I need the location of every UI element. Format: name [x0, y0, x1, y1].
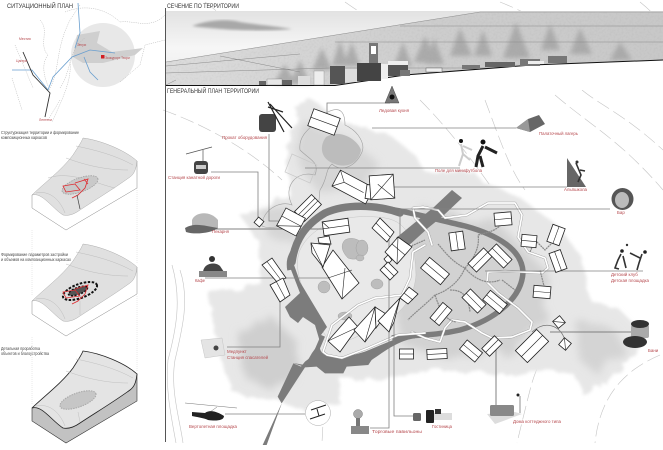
cottage [400, 349, 414, 359]
building: left strip upper [262, 258, 286, 282]
icon: first aid [201, 338, 269, 360]
block sides [32, 161, 137, 230]
caption line 2: и объемов на композиционных каркасах [1, 257, 72, 262]
building: south chain 2 [354, 307, 376, 342]
river [12, 3, 115, 90]
terrain contours [36, 359, 133, 426]
label: Кафе [195, 278, 205, 283]
label: Вертолетная площадка [189, 424, 238, 429]
map labels: Экокурорт Тхори [105, 56, 130, 60]
label: Ледовая кухня [379, 108, 410, 113]
label: Бар [617, 210, 625, 215]
heading: situation plan: СИТУАЦИОННЫЙ ПЛАН [7, 2, 73, 10]
building: right cluster small [384, 255, 392, 264]
cottage [533, 285, 551, 299]
building: south chain 4 [378, 298, 400, 332]
building group: west [295, 195, 321, 221]
panel: terrain section [166, 11, 663, 90]
caption: Детальная проработка [1, 346, 41, 351]
cottage [549, 250, 567, 272]
buildings [254, 109, 571, 363]
cottage [459, 340, 483, 362]
terrain surface [32, 138, 137, 215]
building: centre diamond [322, 250, 359, 299]
section buildings [259, 43, 567, 85]
building: upper square [369, 174, 395, 200]
caption: Структуризация территории и формирование [1, 130, 80, 135]
panel: master plan [205, 95, 643, 445]
label: Станция спасателей [227, 355, 269, 360]
white ground mask [335, 60, 663, 90]
upper pond [322, 134, 361, 166]
settlement drawing [58, 387, 98, 413]
building: left strip lower [270, 278, 290, 302]
hillside [166, 12, 663, 85]
small kiosk [254, 217, 264, 227]
lift tower [369, 43, 378, 63]
icon: rental gear [222, 102, 292, 140]
valley shape [73, 31, 143, 63]
label: Торговые павильоны [372, 429, 422, 434]
ground line [166, 60, 663, 86]
icon: bakery [185, 213, 230, 234]
cottage [488, 244, 512, 268]
cottage large south [515, 329, 549, 363]
label: Бани [648, 348, 659, 353]
hillside grain [169, 60, 257, 84]
white ring paths [323, 203, 548, 358]
misty forest [274, 22, 632, 84]
icon: kids club [611, 244, 650, 283]
terrain contours [36, 146, 133, 213]
terrain contours [36, 252, 133, 319]
icon: ice kitchen [379, 86, 410, 113]
cottage [547, 224, 565, 246]
building: centre long [322, 218, 350, 236]
label: Медпункт [227, 349, 247, 354]
building: centre upper [311, 243, 330, 267]
map labels: Цагери [16, 59, 27, 63]
sky [166, 11, 663, 85]
main vertical divider [164, 8, 166, 442]
building: south chain 5 [400, 287, 418, 304]
building: south chain 3 [375, 307, 386, 328]
study area circle [71, 23, 135, 87]
label: Станция канатной дороги [168, 175, 221, 180]
cottage [483, 290, 507, 314]
main access road [263, 262, 327, 445]
north-east road stub [396, 190, 462, 248]
caption line 2: композиционных каркасов [1, 135, 48, 140]
building: south chain 1 [328, 317, 358, 352]
cottage [521, 234, 537, 248]
leader lines [205, 103, 643, 428]
settlement pattern [60, 172, 100, 209]
terrain wash [207, 95, 640, 412]
ring road: thick north-west arc [292, 206, 400, 262]
label: Дома коттеджного типа [513, 419, 562, 424]
cottage [482, 336, 502, 356]
ring road [289, 206, 523, 338]
map labels: Энгри [77, 43, 86, 47]
label: Пекарня [212, 229, 230, 234]
label: Палаточный лагерь [539, 131, 579, 136]
building: right cluster low [380, 262, 398, 280]
label: Детский клуб [611, 272, 638, 277]
label: Детская площадка [611, 278, 650, 283]
road [23, 52, 50, 117]
bath house [553, 316, 565, 328]
icon: climbing school [564, 158, 588, 192]
main road lower arm [263, 333, 415, 445]
label: Поле для минифутбола [435, 168, 483, 173]
block sides [32, 267, 137, 336]
building: upper small [365, 185, 375, 199]
pedestrian network [402, 222, 555, 322]
terrain surface [32, 244, 137, 321]
building: upper long [332, 170, 374, 204]
icon: football players [435, 139, 497, 173]
settlement volumes [61, 278, 99, 304]
helipad [306, 400, 330, 426]
cottage [494, 212, 512, 226]
caption line 2: объектов и благоустройства [1, 351, 50, 356]
icon: bar barrel [612, 188, 634, 215]
dashed contour lines [163, 2, 663, 443]
label: Гостиница [432, 424, 453, 429]
bath house [559, 338, 571, 350]
panel: isometric step 3 [1, 346, 137, 443]
cottage [449, 231, 465, 251]
icon: cable car [168, 147, 221, 180]
building: right cluster diamond [385, 237, 412, 264]
cottage [427, 348, 447, 360]
block sides [32, 374, 137, 443]
icon: bath barrel [623, 320, 659, 353]
section lines [166, 12, 663, 85]
panel: isometric step 2 [1, 244, 137, 336]
dotted contours [12, 5, 165, 122]
cottage large [421, 257, 449, 285]
icon: cottage sofa [487, 394, 562, 424]
building: west square [277, 208, 305, 236]
building: top [308, 109, 340, 135]
icon: tent camp [516, 115, 579, 136]
ring interior tone [297, 217, 416, 342]
panel: isometric step 1 [1, 130, 137, 230]
bath paths [532, 325, 565, 340]
dotted guides between blocks [32, 188, 137, 404]
icon: cafe [195, 256, 227, 283]
faded building [285, 154, 317, 183]
building: right cluster top [372, 218, 394, 242]
cottage [468, 248, 492, 272]
map labels: Местия [19, 37, 31, 41]
map labels: Лентехи [39, 118, 52, 122]
cloud [192, 20, 292, 30]
icon: helicopter [185, 403, 238, 429]
label [227, 349, 269, 360]
label: Альпшкола [564, 187, 588, 192]
upper park paths [262, 110, 363, 227]
caption: Формирование параметров застройки [1, 252, 69, 257]
icon: stall scale [351, 410, 422, 434]
map labels [16, 37, 130, 122]
label [611, 272, 650, 283]
label: Прокат оборудования [222, 135, 268, 140]
panel: situation plan map [12, 3, 165, 122]
terrain surface [32, 351, 137, 428]
interior ponds [318, 238, 383, 320]
cottage [430, 302, 452, 326]
building: centre top [318, 236, 331, 244]
site marker [101, 55, 104, 58]
icon: hotel [413, 409, 453, 429]
heading: section: СЕЧЕНИЕ ПО ТЕРРИТОРИИ [167, 4, 239, 10]
heading: master plan: ГЕНЕРАЛЬНЫЙ ПЛАН ТЕРРИТОРИИ [167, 87, 259, 95]
cottage [462, 289, 486, 313]
